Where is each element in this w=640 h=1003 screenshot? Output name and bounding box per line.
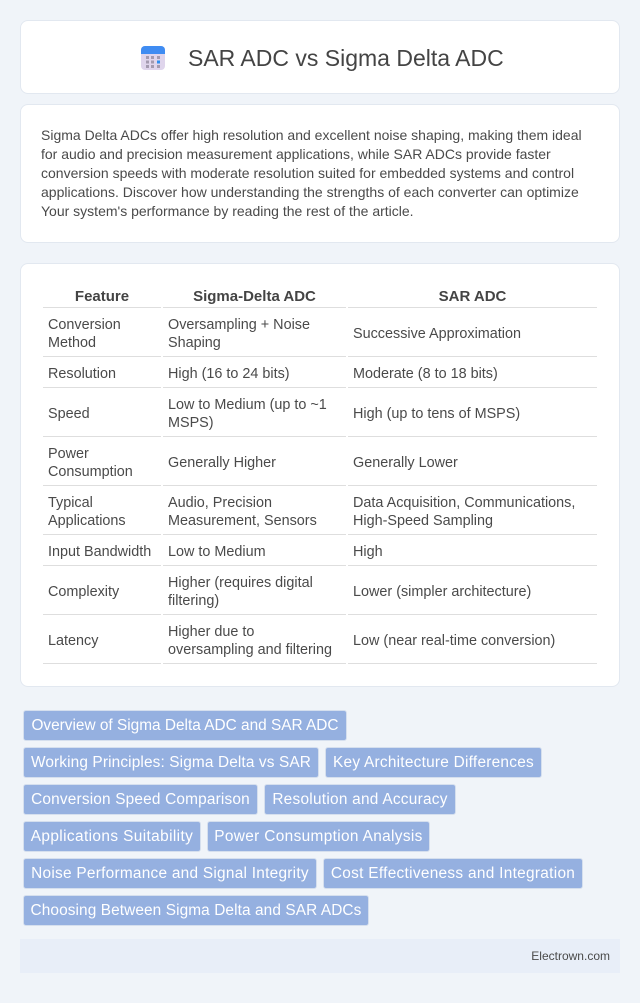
row: conversion method [48,317,521,351]
row: power consumption: Power [48,446,89,462]
icon: calendar [141,46,165,70]
row: power consumption: Consumption [48,464,133,480]
tag [23,747,319,778]
row: typical applications: Audio, Precision [168,495,272,511]
row: speed [48,397,520,431]
intro text: applications. Discover how understanding the strengths of each converter can optimize [41,184,579,200]
intro text: conversion speeds with moderate resolution suited for embedded systems and control [41,165,574,181]
row: latency: Latency [48,633,98,649]
intro text [41,127,582,219]
table header: Feature [75,288,129,305]
table header [75,288,506,305]
row: latency: Higher due to [168,624,254,640]
table header: Sigma-Delta ADC [193,288,316,305]
comparison table panel [20,263,620,687]
topic tags [23,710,583,926]
row: conversion method: Conversion [48,317,121,333]
row: typical applications: Typical [48,495,93,511]
tag: Cost Effectiveness and Integration [331,865,575,882]
tag [207,821,430,852]
row: complexity: Complexity [48,584,119,600]
row: input bandwidth: Low to Medium [168,544,266,560]
tag [23,784,258,815]
tag [23,710,347,741]
row: input bandwidth: High [353,544,383,560]
row: typical applications: Data Acquisition, Communications, [353,495,575,511]
tag: Noise Performance and Signal Integrity [31,865,309,882]
tag: Power Consumption Analysis [214,828,423,845]
row: power consumption [48,446,458,480]
intro text: Your system's performance by reading the rest of the article. [41,203,414,219]
row: speed: Low to Medium (up to ~1 [168,397,327,413]
tag: Conversion Speed Comparison [31,791,250,808]
title: SAR ADC vs Sigma Delta ADC [188,45,504,71]
tag: Choosing Between Sigma Delta and SAR ADCs [31,902,361,919]
row: resolution [48,366,498,382]
row: power consumption: Generally Higher [168,455,276,471]
row: speed: High (up to tens of MSPS) [353,406,520,422]
intro text: for audio and precision measurement applications, while SAR ADCs provide faster [41,146,551,162]
row: resolution: Resolution [48,366,116,382]
row: typical applications: High-Speed Sampling [353,513,493,529]
row: conversion method: Method [48,335,96,351]
row: conversion method: Shaping [168,335,221,351]
tag: Resolution and Accuracy [272,791,448,808]
row: resolution: Moderate (8 to 18 bits) [353,366,498,382]
tag: Overview of Sigma Delta ADC and SAR ADC [31,717,339,734]
tag: Key Architecture Differences [333,754,534,771]
row: power consumption: Generally Lower [353,455,458,471]
row: complexity: filtering) [168,593,219,609]
tag: Applications Suitability [31,828,193,845]
tag [325,747,542,778]
comparison table [43,288,597,664]
row: resolution: High (16 to 24 bits) [168,366,290,382]
row: input bandwidth: Input Bandwidth [48,544,151,560]
footer credit: Electrown.com [531,949,610,963]
tag [23,895,369,926]
row: latency: oversampling and filtering [168,642,332,658]
row: latency [48,624,555,658]
row: typical applications [48,495,575,529]
header panel [20,20,620,94]
row: latency: Low (near real-time conversion) [353,633,555,649]
tag [23,821,201,852]
row: complexity: Lower (simpler architecture) [353,584,531,600]
tag [323,858,583,889]
intro panel [20,104,620,243]
tag [23,858,317,889]
row: typical applications: Applications [48,513,126,529]
row: input bandwidth [48,544,383,560]
tag [264,784,456,815]
row: speed: Speed [48,406,90,422]
row: conversion method: Oversampling + Noise [168,317,310,333]
intro text: Sigma Delta ADCs offer high resolution and excellent noise shaping, making them ideal [41,127,582,143]
tag: Working Principles: Sigma Delta vs SAR [31,754,311,771]
row: speed: MSPS) [168,415,214,431]
row: complexity: Higher (requires digital [168,575,313,591]
footer bar [20,939,620,973]
row: complexity [48,575,531,609]
row: typical applications: Measurement, Sensors [168,513,317,529]
row: conversion method: Successive Approximation [353,326,521,342]
table header: SAR ADC [439,288,506,305]
